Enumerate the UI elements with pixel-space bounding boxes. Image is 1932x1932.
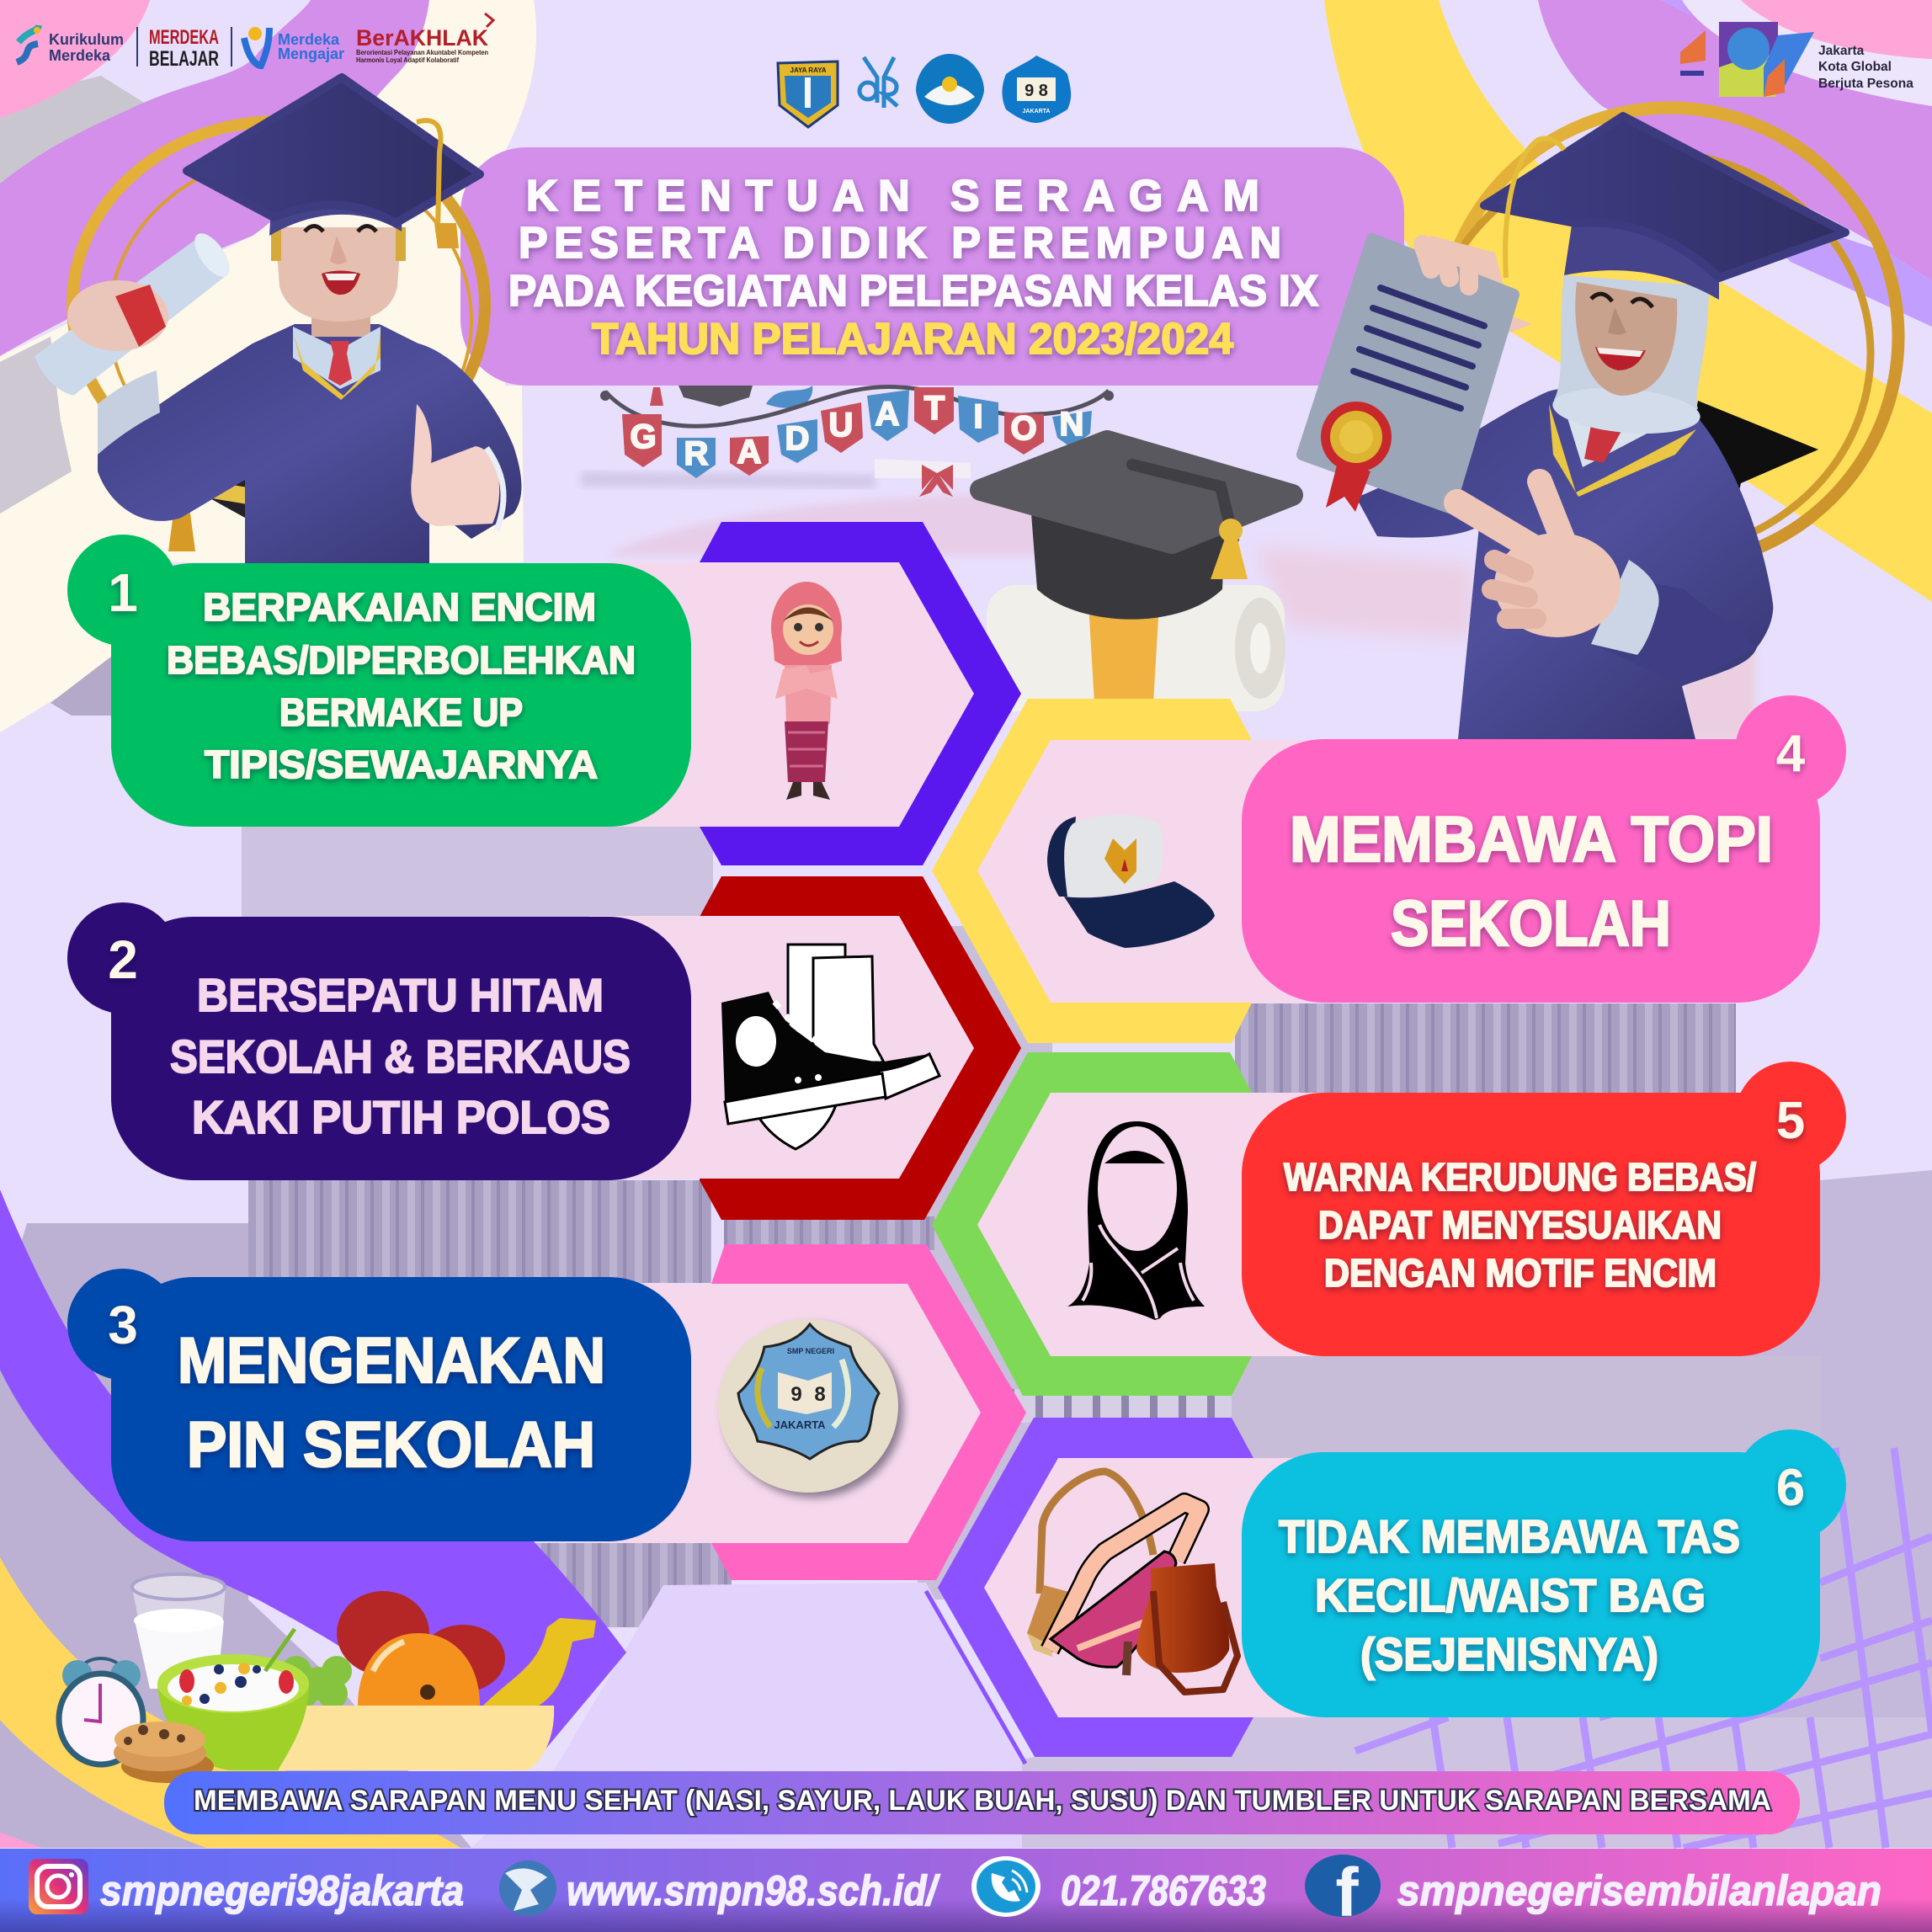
- icon: bags: [1027, 1472, 1237, 1692]
- phone number: 021.7867633: [1061, 1867, 1266, 1914]
- toe cap: [879, 1054, 939, 1099]
- logo: jaya raya shield: [778, 61, 838, 127]
- sleeve cuff: [98, 370, 160, 455]
- fence below box 3: [534, 1543, 732, 1627]
- collar: [1549, 404, 1696, 497]
- gown: [98, 324, 521, 563]
- grey patch below cream: [51, 657, 111, 716]
- icon: hijab silhouette: [1067, 1121, 1205, 1320]
- banana: [483, 1618, 596, 1706]
- flag letters: G: [630, 418, 657, 455]
- number tab: [1735, 1429, 1846, 1541]
- banner: graduation bunting: [600, 386, 1114, 497]
- logo: merdeka belajar: MERDEKA: [149, 26, 219, 49]
- instagram handle: smpnegeri98jakarta: [100, 1867, 464, 1914]
- number tab: [67, 535, 178, 646]
- logo: berakhlak: [356, 13, 493, 64]
- scarf: [1551, 382, 1702, 439]
- seal: [1326, 459, 1370, 512]
- red fruits: [337, 1591, 429, 1675]
- logo: merdeka belajar: BELAJAR: [149, 47, 219, 71]
- gold band: [1088, 589, 1160, 703]
- footer bar: [0, 1849, 1932, 1932]
- pink photo streaks center: [606, 492, 1044, 556]
- number 2: 2: [108, 929, 138, 990]
- cap board: [981, 441, 1292, 543]
- black board behind: [1684, 401, 1818, 514]
- road thin line: [926, 1591, 1025, 1764]
- grid lines bottom right: [1355, 1448, 1932, 1848]
- bow: [919, 465, 953, 497]
- logo: merdeka mengajar: [244, 27, 344, 66]
- sole: [725, 1073, 886, 1124]
- description text: [178, 1325, 605, 1481]
- description text: [1279, 1510, 1740, 1680]
- logo top right: jakarta 497: Jakarta: [1818, 44, 1865, 58]
- yellow wave bottom left: [0, 1557, 460, 1848]
- number 3: 3: [108, 1295, 138, 1355]
- road: [471, 1583, 1022, 1848]
- tassel: [1126, 1642, 1128, 1675]
- number 6: 6: [1776, 1459, 1805, 1517]
- gown: [1356, 387, 1773, 739]
- logo: berakhlak: BerAKHLAK: [356, 25, 488, 51]
- logo row top left: [17, 13, 493, 71]
- neck and face: [311, 303, 370, 337]
- eyes nose mouth: [1591, 294, 1653, 307]
- socks: [751, 1097, 838, 1149]
- title: KETENTUAN SERAGAM: [526, 172, 1259, 221]
- fence photo right: [1235, 1003, 1736, 1093]
- hat string and tassel: [417, 120, 440, 232]
- hand behind document: [1418, 236, 1532, 337]
- hat string: [1505, 138, 1564, 278]
- pink fanny pack: [1051, 1551, 1176, 1667]
- description text: MEMBAWA TOPI: [1290, 804, 1773, 876]
- palm tree photo area: [242, 827, 713, 919]
- description text: KAKI PUTIH POLOS: [192, 1091, 610, 1143]
- brown strap: [1040, 1472, 1153, 1594]
- title: [508, 172, 1318, 364]
- text box: [1242, 739, 1820, 1003]
- sleeve fold lower: [1591, 581, 1757, 686]
- gold tassel: [168, 488, 195, 551]
- icon: school pin badge: [718, 1319, 903, 1498]
- number tab: [1735, 695, 1846, 806]
- icon: school pin badge: JAKARTA: [774, 1418, 826, 1431]
- description text: KECIL/WAIST BAG: [1315, 1569, 1706, 1621]
- flag letters: I: [973, 398, 983, 435]
- flags: [622, 387, 1092, 478]
- description text: BEBAS/DIPERBOLEHKAN: [167, 638, 636, 682]
- description text: [170, 969, 631, 1143]
- alarm clock: [59, 1658, 143, 1764]
- flag letters: U: [829, 407, 853, 444]
- item 6: panel cyan: [938, 1418, 1846, 1757]
- logo: kurikulum merdeka: [17, 25, 124, 64]
- description text: TIPIS/SEWAJARNYA: [205, 742, 598, 786]
- green bowl: [157, 1684, 309, 1770]
- hat: [1564, 203, 1719, 300]
- description text: (SEJENISNYA): [1360, 1628, 1658, 1680]
- description text: BERSEPATU HITAM: [197, 969, 604, 1021]
- lilac band top right: [1734, 202, 1932, 327]
- hexagon frame: [932, 1052, 1252, 1396]
- cap skull: [1031, 514, 1225, 620]
- item 5: panel red: [932, 1052, 1846, 1396]
- description text: [1284, 1155, 1756, 1295]
- description text: PIN SEKOLAH: [187, 1409, 595, 1481]
- icon: black shoe with white socks: [721, 945, 939, 1149]
- hexagon frame: [938, 1418, 1253, 1757]
- hijab: [1554, 275, 1709, 429]
- logo top right: jakarta 497: Berjuta Pesona: [1818, 77, 1913, 91]
- item 2: panel navy: [67, 876, 1021, 1220]
- icon: school pin badge: 9: [790, 1383, 802, 1406]
- icon: school pin badge: 8: [814, 1383, 826, 1406]
- description text: DENGAN MOTIF ENCIM: [1324, 1251, 1716, 1295]
- logo: merdeka mengajar: Mengajar: [278, 45, 344, 62]
- purple curved band top left: [0, 0, 429, 356]
- description text: WARNA KERUDUNG BEBAS/: [1284, 1155, 1756, 1199]
- flag letters: A: [876, 396, 899, 433]
- text box: [1242, 1093, 1820, 1356]
- number 4: 4: [1776, 725, 1806, 783]
- icon: globe: [499, 1860, 556, 1916]
- orange: [358, 1633, 480, 1706]
- text box: [111, 917, 691, 1180]
- document: [1302, 239, 1514, 508]
- description text: [167, 585, 636, 786]
- illustration: graduation cap on scroll: [981, 441, 1292, 711]
- logo: berakhlak: Harmonis Loyal Adaptif Kolaboratif: [356, 56, 459, 64]
- fence photo left: [248, 1180, 711, 1283]
- fingers: [1423, 244, 1469, 286]
- hexagon frame: [700, 522, 1021, 865]
- milk glass: [132, 1587, 226, 1689]
- left top grey photo area: [0, 76, 168, 202]
- website: www.smpn98.sch.id/: [567, 1867, 941, 1914]
- hair sides: [271, 227, 281, 261]
- illustration: boy graduate: [35, 77, 521, 563]
- gray wall left: [0, 1223, 471, 1848]
- flag letters: D: [785, 420, 809, 457]
- title: PADA KEGIATAN PELEPASAN KELAS IX: [508, 267, 1318, 316]
- icon: school pin badge: SMP NEGERI: [787, 1347, 834, 1355]
- brown pouch: [1136, 1563, 1229, 1673]
- shoe upper: [721, 992, 939, 1120]
- fruit bowl: [277, 1706, 554, 1770]
- pink corner top left: [0, 0, 150, 118]
- logo: jaya raya shield: JAYA RAYA: [790, 67, 827, 74]
- peach belt: [1050, 1503, 1200, 1650]
- icon: girl in kebaya: [771, 582, 842, 800]
- hand and scroll: [35, 237, 226, 396]
- text box: [1242, 1452, 1820, 1717]
- scalloped shield: [738, 1324, 879, 1459]
- description text: DAPAT MENYESUAIKAN: [1318, 1203, 1722, 1247]
- eyes and nose: [305, 226, 376, 232]
- light band top right: [1682, 0, 1932, 106]
- logo: tut wuri handayani: [916, 54, 984, 124]
- flag letters: R: [684, 435, 709, 472]
- number tab: [67, 1269, 178, 1380]
- description text: SEKOLAH: [1391, 888, 1671, 960]
- tassel: [1219, 519, 1243, 542]
- gap photo center: [918, 926, 1052, 1599]
- item 4: panel pink: [932, 695, 1846, 1043]
- logo row top center: [778, 54, 1071, 127]
- string: [605, 387, 1109, 426]
- document lines: [1354, 288, 1484, 408]
- illustration: girl graduate: [1302, 108, 1898, 739]
- flag letters: A: [737, 434, 761, 471]
- title: TAHUN PELAJARAN 2023/2024: [592, 315, 1233, 364]
- flag letters: N: [1060, 406, 1083, 443]
- logo: kurikulum merdeka: Merdeka: [49, 47, 111, 64]
- gold ring: [1440, 108, 1898, 566]
- pink corner bottom left: [0, 1833, 42, 1848]
- icon: instagram: [29, 1859, 88, 1914]
- flag letters: T: [924, 390, 945, 427]
- number tab: [1735, 1062, 1846, 1173]
- cuff: [1591, 560, 1659, 655]
- text box: [111, 563, 691, 827]
- pink corner top right: [1741, 0, 1932, 59]
- cookies: [121, 1749, 214, 1783]
- illustration: breakfast group: [59, 1574, 596, 1783]
- logo: berakhlak: Berorientasi Pelayanan Akuntabel Kompeten: [356, 49, 488, 56]
- book: [778, 1372, 832, 1414]
- purple region top right: [1538, 0, 1932, 281]
- number tab: [67, 902, 178, 1014]
- icon: facebook: [1305, 1855, 1381, 1931]
- purple wave bottom left: [0, 1190, 626, 1770]
- breakfast note pill: MEMBAWA SARAPAN MENU SEHAT (NASI, SAYUR, LAUK BUAH, SUSU) DAN TUMBLER UNTUK SARAPAN BERSAMA: [194, 1785, 1771, 1817]
- grapes: [281, 1656, 352, 1709]
- mortarboard: [269, 160, 404, 236]
- title: PESERTA DIDIK PEREMPUAN: [519, 219, 1281, 268]
- black mortarboard behind: [143, 370, 253, 522]
- laces: [774, 1002, 880, 1059]
- number 5: 5: [1776, 1092, 1805, 1150]
- face: [1575, 282, 1677, 396]
- facebook handle: smpnegerisembilanlapan: [1397, 1867, 1881, 1914]
- mouth: [322, 271, 360, 295]
- logo: kurikulum merdeka: Kurikulum: [49, 31, 124, 48]
- gold ring: [72, 121, 485, 488]
- title panel: [460, 147, 1404, 386]
- tan bag: [1027, 1585, 1075, 1653]
- logo top right: jakarta 497: Kota Global: [1818, 60, 1892, 74]
- description text: TIDAK MEMBAWA TAS: [1279, 1510, 1740, 1562]
- cap button strap: [1132, 465, 1233, 539]
- hexagon frame: [932, 699, 1252, 1043]
- collar and tie: [293, 327, 381, 389]
- description text: BERPAKAIAN ENCIM: [203, 585, 596, 629]
- logo: school 98: JAKARTA: [1023, 109, 1050, 114]
- logo top right: jakarta 497: [1680, 22, 1913, 97]
- logo: merdeka belajar: [136, 26, 232, 71]
- mini cap and swoosh: [679, 386, 753, 407]
- number 1: 1: [108, 562, 138, 623]
- item 1: panel green: [67, 522, 1021, 865]
- breakfast note pill: [164, 1771, 1800, 1834]
- thumbs up hand: [411, 404, 499, 526]
- hexagon frame: [700, 876, 1021, 1220]
- white scroll: [987, 585, 1285, 711]
- logo: school 98: 9 8: [1025, 82, 1048, 100]
- text box: [111, 1277, 691, 1541]
- left grey wedge: [0, 337, 72, 514]
- cream curved band: [0, 0, 536, 732]
- wall right: [1726, 1170, 1932, 1848]
- logo: dr symbol: [860, 57, 897, 108]
- pointing hand: [1457, 503, 1532, 547]
- hexagon frame: [711, 1244, 1026, 1580]
- icon: school cap: [1047, 815, 1215, 948]
- logo: school 98: [1002, 56, 1071, 123]
- icon: facebook: f: [1335, 1855, 1359, 1931]
- description text: [1290, 804, 1773, 960]
- logo: merdeka mengajar: Merdeka: [278, 31, 340, 48]
- description text: SEKOLAH & BERKAUS: [170, 1030, 631, 1083]
- flag letters: O: [1010, 410, 1037, 447]
- description text: MENGENAKAN: [178, 1325, 605, 1397]
- icon: phone: [971, 1856, 1041, 1917]
- yellow curved band right: [1324, 0, 1932, 602]
- flag letters: [630, 390, 1083, 472]
- description text: BERMAKE UP: [279, 690, 523, 734]
- item 3: panel blue: [67, 1244, 1026, 1580]
